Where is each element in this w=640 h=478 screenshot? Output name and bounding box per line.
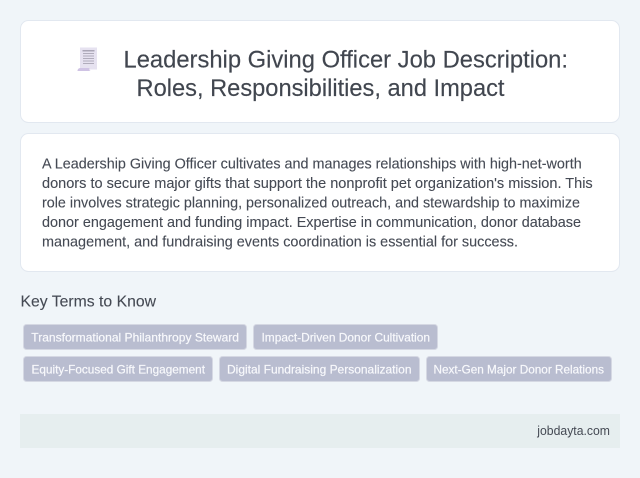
title: Leadership Giving Officer Job Description: [124,46,568,74]
footer source text: jobdayta.com [536,424,610,438]
panel: title card [20,20,620,122]
tag: digital fundraising personalization [220,356,420,382]
tag: transformational philanthropy steward: Transformational Philanthropy Steward [31,330,239,344]
tag: equity-focused gift engagement [24,356,212,382]
tag: digital fundraising personalization: Digital Fundraising Personalization [227,362,412,376]
description text: donor engagement and funding impact. Expertise in communication, donor database [42,215,581,231]
title [124,46,568,102]
description text: A Leadership Giving Officer cultivates and manages relationships with high-net-worth [42,156,582,172]
tag: equity-focused gift engagement: Equity-Focused Gift Engagement [32,362,206,376]
tag: impact-driven donor cultivation [254,324,438,350]
heading: key terms: Key Terms to Know [20,294,156,311]
description text: management, and fundraising events coordination is essential for success. [42,234,518,250]
panel: description card [20,134,620,272]
tags: key terms list [24,324,612,382]
tag: next-gen major donor relations: Next-Gen Major Donor Relations [434,362,604,376]
tag: transformational philanthropy steward [24,324,246,350]
description text [42,156,593,250]
footer bar [20,414,620,448]
title: Roles, Responsibilities, and Impact [136,75,505,102]
icon: document scroll [78,48,97,71]
tag: next-gen major donor relations [426,356,612,382]
description text: donors to secure major gifts that support the nonprofit pet organization's mission. This [42,176,593,192]
description text: role involves strategic planning, personalized outreach, and stewardship to maximize [42,195,580,211]
tag: impact-driven donor cultivation: Impact-Driven Donor Cultivation [262,330,430,344]
